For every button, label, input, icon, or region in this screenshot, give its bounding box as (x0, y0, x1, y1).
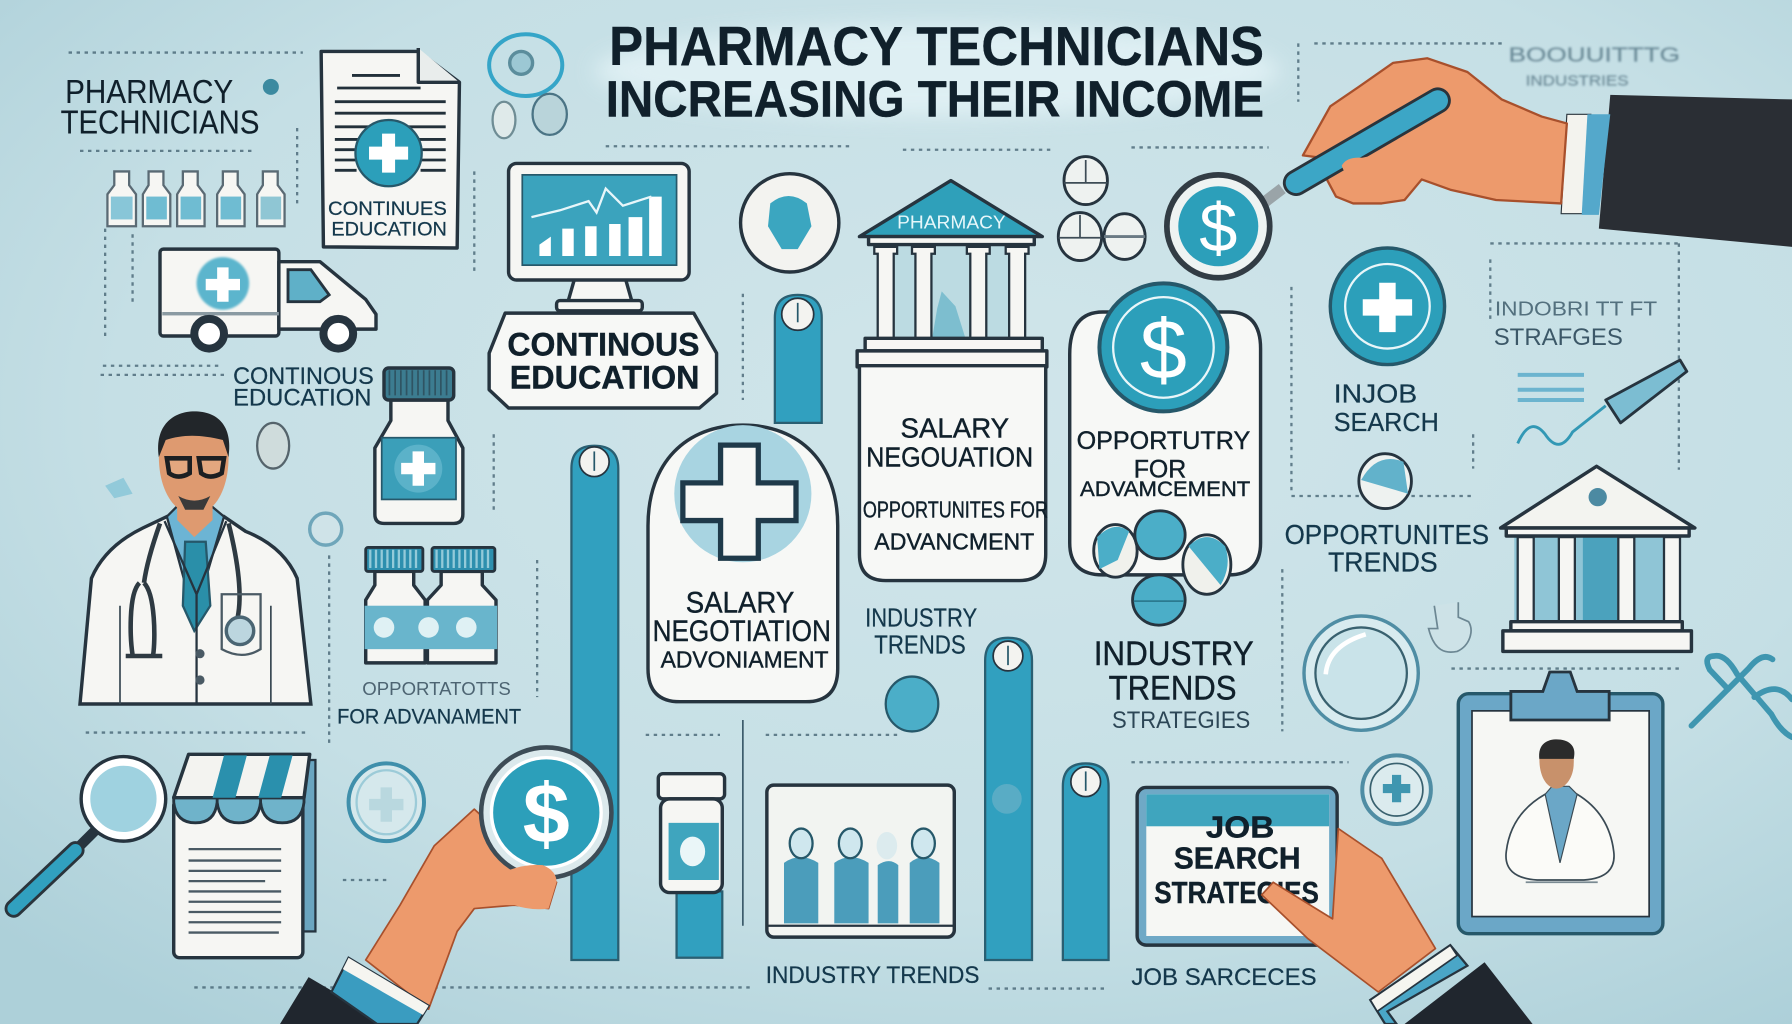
label: continuous education small: CONTINOUS (233, 363, 374, 390)
bar: short teal gauge (775, 295, 822, 423)
label: opportunities for advancement: OPPORTATOTTS (362, 678, 511, 699)
panel: opportunity for advancement card: OPPORTUTRY (1077, 427, 1251, 455)
label: opportunities for advancement (337, 678, 521, 728)
icon: pen and trend line (1518, 360, 1687, 444)
hand holding magnifier, top right (1167, 58, 1792, 278)
icon: small dot (263, 79, 279, 95)
icon: clipboard with person (1458, 672, 1663, 934)
label box: continuous education (489, 313, 717, 408)
label: job search (1334, 378, 1439, 437)
panel: opportunity for advancement card (1070, 283, 1261, 575)
label: opportunities trends (1285, 519, 1489, 577)
shirt cuff (331, 958, 429, 1024)
icon: shop document (174, 754, 315, 958)
shirt cuff (1561, 114, 1591, 214)
label: industry trends strategies (1094, 635, 1254, 734)
bar: short teal gauge right (1063, 763, 1109, 960)
icon: document with cross: EDUCATION (331, 218, 447, 240)
icon: white pills (1058, 157, 1145, 261)
panel: opportunity for advancement card: ADVAMCEMENT (1080, 476, 1250, 501)
panel: salary negotiation card (859, 366, 1048, 581)
label box: continuous education: EDUCATION (510, 360, 699, 396)
title (594, 15, 1280, 128)
label: industry trends bottom: INDUSTRY TRENDS (766, 962, 979, 989)
panel: people chart card (767, 785, 954, 937)
thumb (469, 865, 557, 909)
hand holding dollar coin, bottom left (280, 747, 611, 1024)
tablet: job search strategies (1137, 787, 1337, 945)
panel: salary negotiation cross card (648, 425, 838, 702)
panel: salary negotiation cross card: NEGOTIATION (653, 615, 831, 648)
label: pharmacy technicians (61, 74, 259, 142)
thumb (1342, 135, 1431, 185)
panel: salary negotiation cross card: ADVONIAMENT (661, 646, 829, 672)
label: industry trends: TRENDS (874, 630, 966, 660)
dollar coin: $ (523, 765, 570, 860)
panel: salary negotiation cross card: SALARY (686, 587, 794, 620)
tablet: job search strategies: JOB (1206, 810, 1274, 845)
icon: light blue ring (349, 763, 424, 841)
label: job sources bottom: JOB SARCECES (1131, 964, 1317, 991)
panel: opportunity for advancement card: $ (1140, 301, 1187, 396)
icon: small cross badge (1362, 755, 1431, 824)
magnifier (1167, 175, 1282, 278)
label: faded top right text: INDUSTRIES (1526, 74, 1629, 90)
icon: row of bottles (107, 171, 285, 226)
tablet: job search strategies: STRATEGIES (1154, 875, 1319, 910)
tablet: job search strategies: SEARCH (1174, 841, 1301, 876)
figure: pharmacist (80, 411, 311, 704)
bar: tall teal gauge (571, 446, 618, 960)
icon: bank building right (1501, 466, 1695, 651)
panel: salary negotiation card: ADVANCMENT (874, 529, 1034, 555)
label: job search strategies: STRAFGES (1494, 324, 1623, 351)
label: opportunities for advancement: FOR ADVANAMENT (337, 703, 521, 728)
icon: pharmacy building: PHARMACY (897, 212, 1006, 233)
icon: teal pills (1094, 511, 1231, 625)
icon: small gauge (1359, 454, 1411, 509)
icon: delivery truck (160, 249, 376, 349)
icon: teal ball (886, 677, 938, 731)
label: job search strategies: INDOBRI TT FT (1495, 297, 1658, 320)
label: faded top right text: BOOUUITTTG (1509, 44, 1680, 67)
panel: opportunity for advancement card: FOR (1134, 456, 1186, 484)
panel: salary negotiation card: NEGOUATION (866, 441, 1033, 472)
icon: pair of vials (365, 547, 497, 663)
hand holding tablet, bottom right (1262, 829, 1533, 1024)
hand (1303, 58, 1567, 203)
icon: pharmacy building (857, 181, 1047, 367)
monitor with chart (509, 163, 689, 311)
label: pharmacy technicians: PHARMACY (65, 74, 233, 111)
label: continuous education small (233, 363, 374, 412)
label: faded top right text (1509, 44, 1680, 90)
bar: medium teal gauge (985, 638, 1032, 960)
label: job search: INJOB (1334, 378, 1417, 408)
magnifier: $ (1199, 189, 1237, 266)
icon: top circles (489, 34, 567, 138)
panel: salary negotiation card: SALARY (901, 413, 1009, 444)
blue cuff stripe (1582, 114, 1610, 215)
icon: document with cross: CONTINUES (328, 198, 447, 220)
icon: medicine bottle (375, 368, 463, 523)
label: pharmacy technicians: TECHNICIANS (61, 105, 259, 142)
icon: vial on bar (658, 774, 725, 958)
icon: round badge with cross (741, 174, 839, 272)
icon: faded shapes (105, 423, 342, 545)
label: industry trends (865, 602, 977, 660)
label: opportunities trends: OPPORTUNITES (1285, 519, 1489, 550)
icon: small flask (1429, 602, 1471, 652)
panel: salary negotiation card: OPPORTUNITES FOR (863, 497, 1048, 523)
label: industry trends strategies: INDUSTRY (1094, 635, 1254, 673)
label: industry trends strategies: TRENDS (1109, 669, 1237, 707)
icon: teal cross badge (1330, 248, 1445, 365)
label box: continuous education: CONTINOUS (507, 326, 699, 362)
label: industry trends: INDUSTRY (865, 602, 977, 632)
label: job search strategies (1494, 297, 1658, 351)
dollar coin (481, 747, 611, 878)
magnifier handle (1296, 101, 1438, 183)
label: opportunities trends: TRENDS (1328, 546, 1438, 577)
icon: glass circle (1304, 616, 1418, 730)
title: INCREASING THEIR INCOME (606, 70, 1264, 128)
icon: scissors (1691, 656, 1792, 737)
label: continuous education small: EDUCATION (233, 385, 371, 412)
title: PHARMACY TECHNICIANS (609, 15, 1264, 77)
icon: document with cross (321, 48, 459, 248)
label: job search: SEARCH (1334, 407, 1439, 437)
icon: magnifying glass left (14, 757, 166, 909)
suit sleeve (1599, 95, 1792, 247)
label: industry trends strategies: STRATEGIES (1112, 707, 1250, 734)
